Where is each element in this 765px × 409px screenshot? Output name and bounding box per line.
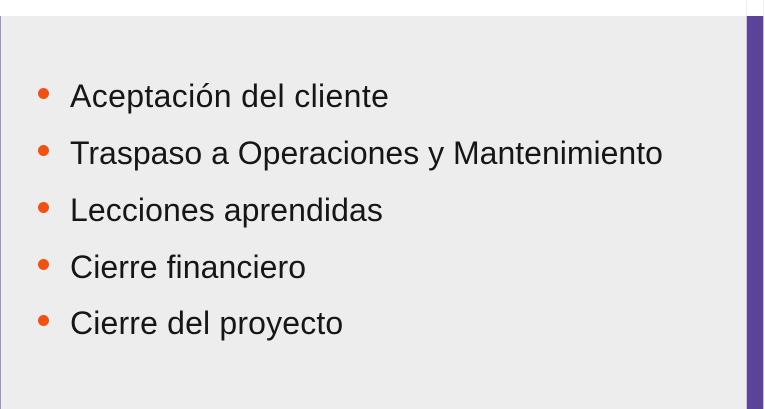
panel left border [0,16,1,409]
list item: Cierre financiero: Cierre financiero [70,249,306,285]
list item: Lecciones aprendidas: Lecciones aprendidas [70,192,383,228]
list item: Traspaso a Operaciones y Mantenimiento: Traspaso a Operaciones y Mantenimiento [70,135,663,171]
list item: Aceptación del cliente: Aceptación del cliente [70,78,389,114]
list item: Cierre del proyecto: Cierre del proyecto [70,305,343,341]
faint top-right guide lines [746,0,747,16]
right purple bar [746,16,764,409]
bullet list [38,78,663,341]
